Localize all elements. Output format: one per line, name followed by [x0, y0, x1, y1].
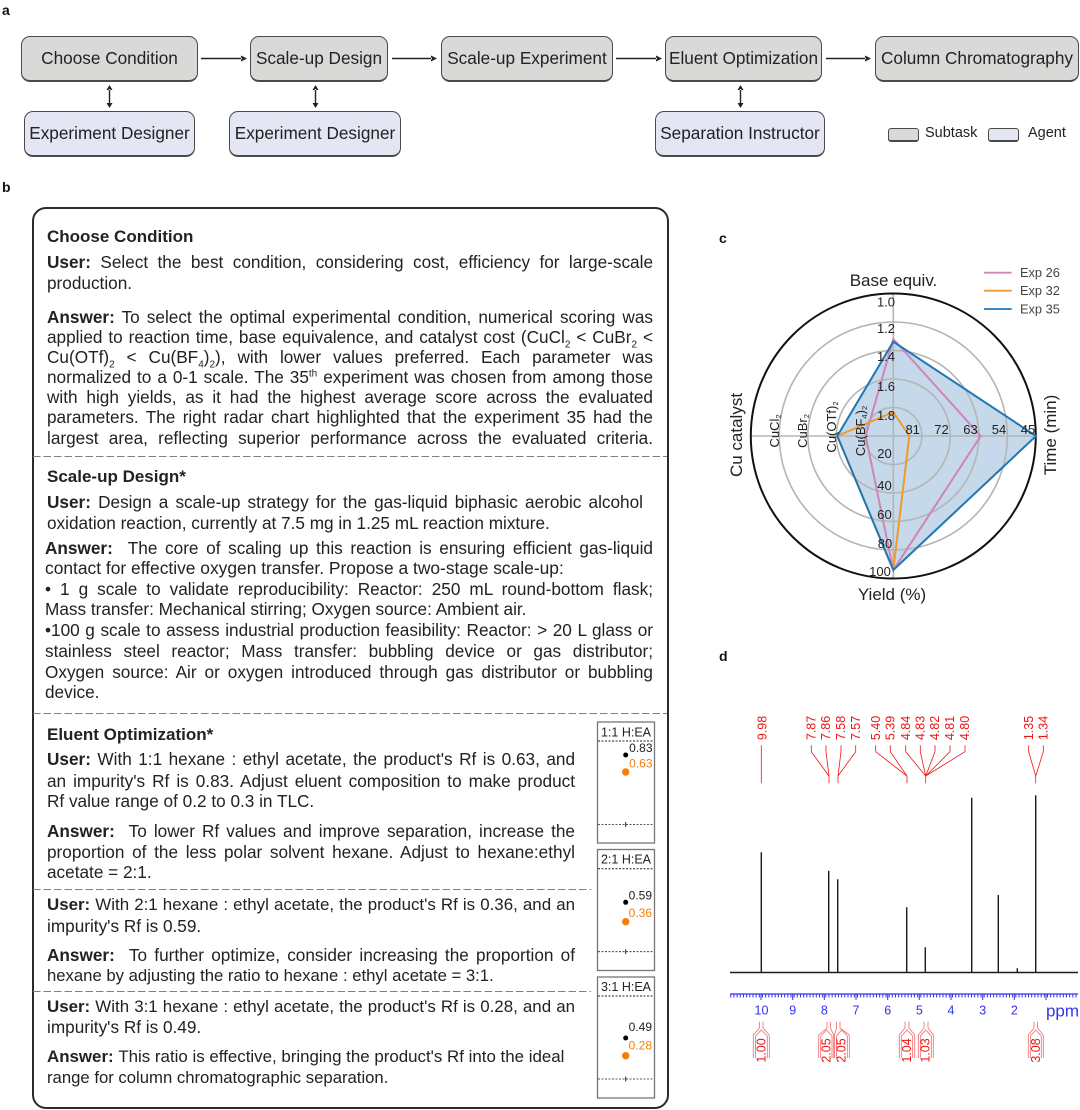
section: Choose Condition: Answer: To select the optimal experimental condition, numerical scoring was: [47, 307, 653, 327]
section: Choose Condition: parameters. The right radar chart highlighted that the experiment 35 had the: [47, 407, 653, 427]
radar tick labels: 2: [802, 414, 811, 418]
panel a: workflow diagram: [21, 36, 1079, 157]
TLC plate 1:1: 0.63: [629, 756, 653, 770]
integral values: 2.05: [820, 1038, 834, 1063]
TLC plate 3:1: 3:1 H:EA: [601, 980, 652, 994]
peak labels: 7.58: [834, 716, 848, 740]
legend swatch: agent: [988, 128, 1019, 142]
integral values: 1.04: [900, 1038, 914, 1063]
section: Choose Condition: with high yields, as it had the highest average score across the evaluated: [47, 387, 653, 407]
radar tick labels: ): [853, 410, 868, 414]
TLC plate 1:1: 1:1 H:EA: [601, 726, 652, 740]
panel label d: d: [719, 648, 728, 664]
radar axis titles: Time (min): [1041, 395, 1060, 475]
section: Scale-up Design: stainless steel reactor; Mass transfer: bubbling device or gas distributor;: [45, 641, 653, 661]
radar legend: Exp 32: [1020, 283, 1060, 298]
radar tick labels: 1.2: [877, 321, 895, 336]
section: Eluent Optimization 1:1: [47, 725, 575, 882]
panel label c: c: [719, 230, 727, 246]
section: Eluent Optimization 1:1: acetate = 2:1.: [47, 862, 152, 882]
peak labels: 9.98: [756, 716, 770, 740]
TLC plate 2:1: 2:1 H:EA: [601, 852, 652, 866]
peak connector lines: [761, 745, 1043, 783]
integral values: 2.05: [834, 1038, 848, 1063]
section: Scale-up Design: • 1 g scale to validate reproducibility: Reactor: 250 mL round-bottom flask;: [45, 579, 653, 599]
subtask: Scale-up Design: Scale-up Design: [256, 48, 382, 68]
radar series: Exp 32: [837, 412, 909, 570]
section: Eluent Optimization 3:1: Answer: This ratio is effective, bringing the product's Rf into the ideal: [47, 1047, 564, 1066]
section: Choose Condition: largest area, reflecting superior performance across the evaluated criteria.: [47, 428, 653, 448]
subtask: Scale-up Experiment: [441, 36, 613, 82]
radar tick labels: 45: [1021, 422, 1035, 437]
panel label b: b: [2, 179, 11, 195]
radar tick labels: 1.0: [877, 294, 895, 310]
ppm axis labels: [755, 1002, 1079, 1020]
subtask: Scale-up Experiment: Scale-up Experiment: [447, 48, 607, 68]
TLC plate 2:1: [598, 850, 654, 970]
TLC plate 1:1: 0.83: [629, 741, 653, 755]
panel b: conversation box: [32, 207, 669, 1109]
section: Eluent Optimization 2:1: hexane by adjusting the ratio to hexane : ethyl acetate = 3:1.: [47, 966, 494, 985]
radar axis titles: [727, 271, 1060, 604]
peak labels: 4.81: [943, 716, 957, 740]
peak labels: [756, 716, 1050, 740]
integral values: [754, 1038, 1043, 1063]
agent: Experiment Designer 1: [24, 111, 195, 157]
integral values: 1.03: [919, 1038, 933, 1063]
ppm axis labels: 4: [948, 1004, 955, 1018]
radar tick labels: 63: [963, 422, 978, 437]
peak labels: 1.34: [1036, 716, 1050, 740]
section: Choose Condition: Cu(OTf)2 < Cu(BF4)2), with lower values preferred. Each parameter was: [47, 347, 653, 370]
radar tick labels: 40: [877, 478, 892, 493]
section: Eluent Optimization 3:1: [47, 997, 575, 1087]
section: Eluent Optimization 3:1: impurity's Rf is 0.49.: [47, 1017, 201, 1037]
radar tick labels: [767, 294, 1035, 579]
agent: Experiment Designer 2: Experiment Designer: [235, 123, 395, 143]
NMR spectrum: [730, 716, 1079, 1063]
peak labels: 4.82: [928, 716, 942, 740]
TLC plate 2:1: 0.59: [629, 888, 652, 902]
radar series: Exp 35: [837, 342, 1036, 570]
subtask: Scale-up Design: [250, 36, 388, 82]
TLC plate 3:1: [598, 977, 654, 1098]
section: Eluent Optimization 1:1: Eluent Optimization*: [47, 725, 213, 744]
radar tick labels: 72: [934, 422, 949, 437]
radar tick labels: Cu(BF: [853, 419, 868, 456]
subtask: Eluent Optimization: Eluent Optimization: [669, 48, 818, 68]
TLC plate 2:1: 0.36: [629, 906, 652, 920]
radar legend: Exp 35: [1020, 302, 1060, 316]
ppm axis labels: 2: [1011, 1004, 1018, 1018]
section: Eluent Optimization 1:1: an impurity's Rf is 0.83. Adjust eluent composition to make product: [47, 771, 575, 791]
ppm axis labels: 5: [916, 1004, 923, 1018]
ppm axis labels: 3: [979, 1004, 986, 1018]
TLC plate 3:1: 0.28: [629, 1038, 652, 1052]
section: Choose Condition: production.: [47, 273, 132, 293]
agent: Separation Instructor: [655, 111, 825, 157]
ppm axis: [730, 994, 1078, 1000]
ppm axis labels: 9: [789, 1004, 796, 1018]
section: Eluent Optimization 2:1: Answer: To further optimize, consider increasing the proportion of: [47, 945, 575, 965]
section: Choose Condition: User: Select the best condition, considering cost, efficiency for large-scale: [47, 252, 653, 272]
spectrum trace: [730, 795, 1078, 972]
legend text: agent: Agent: [1028, 125, 1066, 141]
radar tick labels: 60: [877, 507, 892, 522]
section: Scale-up Design: User: Design a scale-up strategy for the gas-liquid biphasic aerobic alcohol: [47, 492, 643, 512]
section: Scale-up Design: device.: [45, 682, 99, 702]
panel label a: a: [2, 2, 10, 18]
radar tick labels: 20: [877, 446, 892, 461]
radar tick labels: 4: [860, 414, 869, 419]
section: Scale-up Design: oxidation reaction, currently at 7.5 mg in 1.25 mL reaction mixture.: [47, 513, 550, 533]
legend text: subtask: Subtask: [925, 125, 977, 141]
radar tick labels: 54: [992, 422, 1006, 437]
radar tick labels: 1.8: [877, 408, 895, 423]
peak labels: 4.80: [958, 716, 972, 740]
section: Eluent Optimization 1:1: Answer: To lower Rf values and improve separation, increase the: [47, 821, 575, 841]
section: Scale-up Design: contact for effective oxygen transfer. Propose a two-stage scale-up:: [45, 558, 564, 578]
radar tick labels: 80: [878, 536, 892, 551]
ppm axis labels: ppm: [1046, 1002, 1079, 1020]
agent: Experiment Designer 2: [229, 111, 401, 157]
radar axis titles: Cu catalyst: [727, 393, 746, 477]
agent: Experiment Designer 1: Experiment Designer: [29, 123, 190, 143]
legend swatch: subtask: [888, 128, 919, 142]
subtask: Column Chromatography: Column Chromatography: [881, 48, 1073, 68]
radar legend: [984, 265, 1060, 316]
peak labels: 5.40: [869, 716, 883, 740]
section: Eluent Optimization 1:1: proportion of the less polar solvent hexane. Adjust to hexane:ethyl: [47, 842, 575, 862]
peak labels: 7.87: [804, 716, 818, 740]
radar axis titles: Base equiv.: [850, 271, 937, 290]
integral values: 3.08: [1029, 1038, 1043, 1063]
ppm axis labels: 7: [853, 1004, 860, 1018]
radar series: Exp 26: [866, 339, 981, 570]
peak labels: 7.86: [819, 716, 833, 740]
radar legend: Exp 26: [1020, 265, 1060, 280]
peak labels: 4.84: [899, 716, 913, 740]
section: Scale-up Design: •100 g scale to assess industrial production feasibility: Reactor: > 20 L glass or: [45, 620, 653, 640]
radar tick labels: Cu(OTf): [824, 406, 839, 453]
section: Eluent Optimization 3:1: range for column chromatographic separation.: [47, 1068, 388, 1087]
integrals: [753, 1022, 1043, 1058]
peak labels: 1.35: [1022, 716, 1036, 740]
peak labels: 4.83: [914, 716, 928, 740]
radar tick labels: 1.4: [877, 349, 895, 364]
subtask: Choose Condition: [21, 36, 198, 82]
radar tick labels: 100: [869, 564, 891, 579]
section: Choose Condition: normalized to a 0-1 scale. The 35th experiment was chosen from among those: [47, 367, 653, 387]
section: Eluent Optimization 1:1: Rf value range of 0.2 to 0.3 in TLC.: [47, 791, 314, 811]
section: Eluent Optimization 2:1: impurity's Rf is 0.59.: [47, 916, 201, 936]
section: Eluent Optimization 1:1: User: With 1:1 hexane : ethyl acetate, the product's Rf is 0.63, and: [47, 749, 575, 769]
section: Eluent Optimization 2:1: User: With 2:1 hexane : ethyl acetate, the product's Rf is 0.36, and an: [47, 895, 575, 914]
radar tick labels: 2: [774, 414, 783, 419]
subtask: Eluent Optimization: [665, 36, 822, 82]
ppm axis labels: 10: [755, 1004, 768, 1018]
section: Eluent Optimization 2:1: [47, 895, 576, 985]
section: Scale-up Design: Oxygen source: Air or oxygen introduced through gas distributor or bubbling: [45, 662, 653, 682]
peak labels: 7.57: [849, 716, 863, 740]
integral values: 1.00: [754, 1038, 768, 1063]
radar tick labels: 2: [831, 401, 840, 406]
radar tick labels: CuBr: [795, 418, 810, 448]
radar tick labels: 1.6: [877, 379, 895, 394]
section: Choose Condition: applied to reaction time, base equivalence, and catalyst cost (CuCl2 < CuBr2 <: [47, 327, 653, 350]
radar tick labels: 2: [860, 406, 869, 410]
TLC plate 3:1: 0.49: [629, 1020, 652, 1034]
section: Choose Condition: [47, 227, 653, 448]
ppm axis labels: 6: [884, 1004, 891, 1018]
agent: Separation Instructor: Separation Instructor: [660, 123, 820, 143]
section: Scale-up Design: Scale-up Design*: [47, 467, 186, 486]
radar tick labels: 81: [905, 422, 920, 437]
section: Scale-up Design: [45, 467, 653, 702]
section: Scale-up Design: Answer: The core of scaling up this reaction is ensuring efficient gas-liquid: [45, 538, 653, 558]
workflow arrows: [106, 56, 871, 108]
ppm axis labels: 8: [821, 1004, 828, 1018]
radar chart: [727, 265, 1060, 604]
subtask: Column Chromatography: [875, 36, 1079, 82]
radar axis titles: Yield (%): [858, 585, 926, 604]
peak labels: 5.39: [884, 716, 898, 740]
subtask: Choose Condition: Choose Condition: [41, 48, 178, 68]
TLC plate 1:1: [598, 722, 654, 843]
section: Scale-up Design: Mass transfer: Mechanical stirring; Oxygen source: Ambient air.: [45, 599, 526, 619]
section: Eluent Optimization 3:1: User: With 3:1 hexane : ethyl acetate, the product's Rf is 0.28, and an: [47, 997, 575, 1016]
radar tick labels: CuCl: [767, 419, 782, 448]
section: Choose Condition: Choose Condition: [47, 227, 193, 246]
